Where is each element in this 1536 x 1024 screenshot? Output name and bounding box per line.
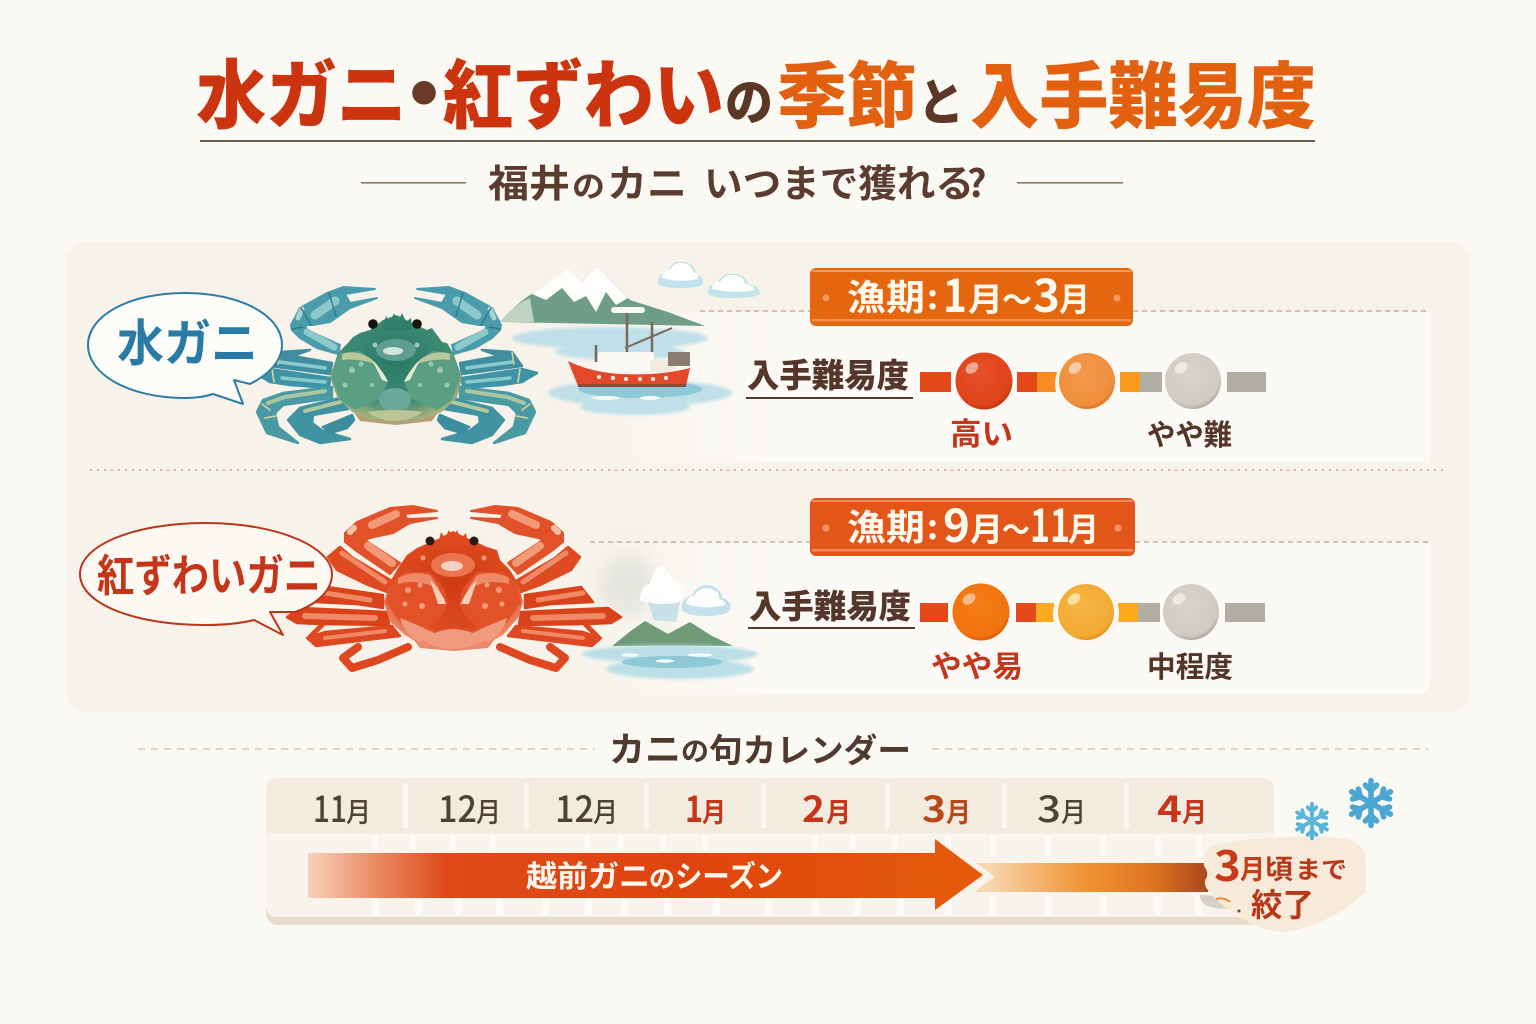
pill: season mizugani <box>810 260 1133 326</box>
subtitle: カニ <box>607 164 687 206</box>
pill: season mizugani: 〜 <box>1002 283 1032 318</box>
month labels: 12 <box>555 781 594 833</box>
pill: season beni-zuwai <box>810 490 1135 556</box>
month labels: 月 <box>946 791 971 830</box>
label: somewhat easy: やや易 <box>931 651 1023 684</box>
label: somewhat hard: やや難 <box>1147 419 1232 452</box>
level dot: middle <box>1053 581 1119 647</box>
month labels: 1 <box>685 781 703 833</box>
month labels: 4 <box>1157 781 1182 833</box>
month labels: 月 <box>702 791 726 830</box>
callout: ends around March: 月 <box>1240 855 1265 885</box>
icon: fishing boat <box>568 310 690 387</box>
title: 入手難易度 <box>970 58 1316 138</box>
fading season band <box>974 863 1208 892</box>
pill: season mizugani: 月 <box>1059 281 1090 318</box>
difficulty meter: beni-zuwai: 入手難易度 <box>749 588 911 625</box>
season arrow <box>308 839 983 910</box>
label: medium: 中程度 <box>1147 651 1233 684</box>
month labels <box>313 781 1207 833</box>
speech bubble: beni-zuwai <box>80 523 332 635</box>
title: 紅ずわい <box>443 54 724 138</box>
title: と <box>918 75 964 131</box>
panel: crab species <box>66 242 1471 712</box>
scenery: haze, clouds, island and sea <box>582 553 758 679</box>
scenery: snowy mountain, sea and fishing boat <box>500 262 760 415</box>
speech bubble: beni-zuwai: 紅ずわいガニ <box>97 552 321 601</box>
title: ・ <box>382 29 466 150</box>
month labels: 2 <box>802 781 825 833</box>
calendar heading: カニ <box>609 731 681 770</box>
pill: season mizugani: 漁期 <box>847 277 925 318</box>
calendar heading: 句カレンダー <box>709 732 911 769</box>
level dot: mid <box>1055 352 1119 416</box>
month labels: 月 <box>1182 791 1207 830</box>
calendar base <box>266 778 1274 925</box>
pill: season beni-zuwai: 月 <box>970 511 1003 548</box>
crab: green mizugani <box>255 287 537 443</box>
calendar <box>266 778 1390 932</box>
label: high: 高い <box>950 417 1013 452</box>
difficulty meter: beni-zuwai <box>748 580 1265 684</box>
month labels: 3 <box>1037 781 1061 833</box>
title <box>196 29 1316 150</box>
month labels: 月 <box>476 791 501 830</box>
speech bubble: mizugani: 水ガニ <box>117 316 258 372</box>
month labels: 月 <box>1061 791 1086 830</box>
month labels: 3 <box>922 781 946 833</box>
title: 水ガニ <box>196 54 407 138</box>
icon: clouds <box>658 262 760 298</box>
callout: ends around March: まで <box>1295 857 1347 884</box>
subtitle: いつまで獲れる <box>704 164 974 206</box>
callout: ends around March <box>1200 833 1366 932</box>
month labels: 月 <box>826 791 851 830</box>
month labels: 11 <box>313 781 347 833</box>
level dot: grey <box>1163 584 1219 640</box>
pill: season mizugani: 1 <box>943 260 967 325</box>
pill: season beni-zuwai: 9 <box>943 490 970 555</box>
callout: ends around March: 頃 <box>1265 855 1293 885</box>
crab: red beni-zuwai <box>287 506 621 668</box>
icon: small snowflake <box>1297 804 1327 838</box>
pill: season beni-zuwai: 11 <box>1030 490 1070 555</box>
month labels: 12 <box>438 781 477 833</box>
pill: season beni-zuwai: 月 <box>1068 511 1099 548</box>
title: 季節 <box>777 58 917 138</box>
calendar heading <box>138 731 1428 770</box>
title: の <box>725 75 773 131</box>
month labels: 月 <box>346 791 371 830</box>
callout: ends around March: 3 <box>1214 833 1241 894</box>
speech bubble: mizugani <box>88 293 282 404</box>
callout: ends around March: 絞了 <box>1251 887 1314 923</box>
month labels: 月 <box>593 791 618 830</box>
subtitle: 福井 <box>488 164 570 206</box>
subtitle: の <box>572 171 605 204</box>
icon: large snowflake <box>1352 781 1390 825</box>
pill: season mizugani: 3 <box>1033 260 1060 325</box>
pill: season beni-zuwai: : <box>927 500 938 549</box>
pill: season beni-zuwai: 〜 <box>1002 513 1030 548</box>
season arrow: の <box>649 866 675 893</box>
difficulty meter: mizugani <box>746 352 1266 452</box>
pill: season mizugani: : <box>927 270 938 319</box>
calendar heading: の <box>681 737 709 767</box>
season arrow: シーズン <box>675 860 783 894</box>
level dot: low <box>1165 353 1221 409</box>
level dot: high <box>956 352 1012 410</box>
pill: season mizugani: 月 <box>968 281 1003 318</box>
level dot: somewhat easy <box>948 580 1014 646</box>
subtitle: ? <box>967 153 987 208</box>
season arrow: 越前ガニ <box>526 861 650 894</box>
difficulty meter: mizugani: 入手難易度 <box>747 357 909 394</box>
pill: season beni-zuwai: 漁期 <box>847 507 925 548</box>
subtitle <box>361 153 1123 208</box>
